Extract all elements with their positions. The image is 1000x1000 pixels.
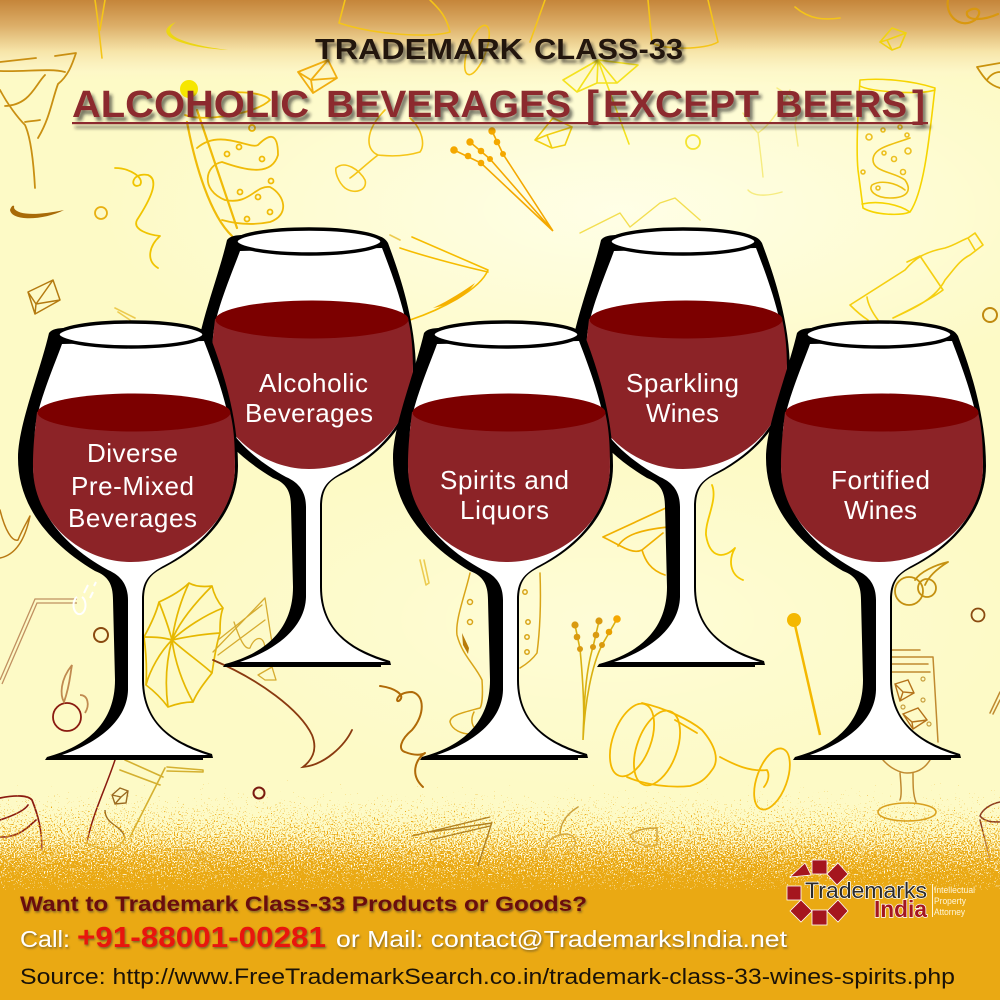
doodle: whisk in speckle <box>412 817 492 866</box>
logo tagline: Attorney <box>934 907 965 917</box>
background: speckled gold transition <box>0 780 1000 892</box>
doodle: lower ring <box>254 788 264 798</box>
logo tagline <box>932 884 975 917</box>
doodle: lower-left cup <box>0 796 42 850</box>
heading: Trademark Class-33: TRADEMARK <box>315 34 523 66</box>
doodle: small ring <box>95 207 107 219</box>
doodle: far right cup <box>980 802 1000 860</box>
logo tagline: Intellectual <box>934 885 975 895</box>
doodle: brown cube <box>28 280 60 314</box>
doodle: ice cube <box>298 60 337 93</box>
doodle: beer glass <box>857 79 935 214</box>
footer: contact line: +91-88001-00281 <box>77 922 326 954</box>
heading: Alcoholic Beverages except beers: ] <box>912 84 925 126</box>
doodle: cocktail pick <box>787 613 820 735</box>
heading: Alcoholic Beverages except beers: ALCOHOLIC <box>72 84 309 126</box>
wine glass: Diverse Pre-Mixed Beverages <box>18 322 238 760</box>
doodle: top straw <box>95 0 105 58</box>
doodle: yellow swoosh <box>166 22 228 50</box>
label <box>68 438 197 533</box>
doodle: top-right glass <box>648 0 840 48</box>
doodle: balloon glass <box>336 110 423 191</box>
doodle: small marks <box>115 235 400 320</box>
doodle: white fizz <box>74 582 96 614</box>
doodle: top lines <box>530 0 545 42</box>
footer: source line: Source: http://www.FreeTrademarkSearch.co.in/trademark-class-33-wines-spirits.php <box>20 964 955 989</box>
label: Liquors <box>460 495 549 525</box>
footer: contact line: or Mail: contact@TrademarksIndia.net <box>336 926 788 952</box>
doodle: yellow pick ball <box>180 80 198 98</box>
doodle: small top umbrella <box>563 60 638 144</box>
doodle: left curl <box>0 510 30 558</box>
label <box>831 465 930 525</box>
label <box>245 368 373 428</box>
doodle: cocktail glass with cubes <box>878 650 938 821</box>
label <box>626 368 739 428</box>
label: Alcoholic <box>259 368 368 398</box>
heading: Trademark Class-33: CLASS-33 <box>534 34 683 66</box>
background: solid gold footer <box>0 890 1000 1000</box>
label: Diverse <box>87 438 178 468</box>
doodle: second bouquet <box>571 615 621 740</box>
heading: Trademark Class-33 <box>315 34 683 66</box>
logo tagline: Property <box>934 896 966 906</box>
doodle: martini behind center <box>400 237 488 320</box>
doodle: bottle <box>850 233 983 320</box>
doodle: tiny mid doodles <box>176 807 657 868</box>
heading: Alcoholic Beverages except beers: EXCEPT <box>603 84 759 126</box>
background: light wash under speckles <box>0 830 1000 892</box>
wine glass: Spirits and Liquors <box>393 322 613 760</box>
background: top orange fade band <box>0 0 1000 85</box>
label: Beverages <box>68 503 197 533</box>
doodle: ring far right <box>983 308 997 322</box>
logo wordmark: Trademarks <box>805 878 927 903</box>
doodle: flute <box>450 573 540 734</box>
doodle: ring left <box>94 628 108 642</box>
doodle: umbrella <box>144 583 223 707</box>
doodle: ring <box>686 135 700 149</box>
label: Pre-Mixed <box>71 471 194 501</box>
doodle: corner martini <box>977 63 1000 88</box>
label: Spirits and <box>440 465 569 495</box>
doodle: right cherries <box>895 562 948 605</box>
doodle: lower-left soda glass <box>87 760 203 850</box>
label: Beverages <box>245 398 373 428</box>
label: Sparkling <box>626 368 739 398</box>
heading: Alcoholic Beverages except beers: BEERS <box>775 84 907 126</box>
doodle: ring right <box>972 608 984 622</box>
doodle: top-left martini glass <box>0 53 76 188</box>
background doodles: upper half <box>0 0 1000 558</box>
doodle: left straw <box>0 599 77 684</box>
label: Wines <box>646 398 719 428</box>
doodle: bent straw <box>580 198 700 233</box>
doodle: heart glass <box>603 507 668 575</box>
doodle: faded martini <box>743 88 798 195</box>
doodle: small cube <box>535 118 572 148</box>
background doodles: lower half <box>0 485 1000 868</box>
heading: Alcoholic Beverages except beers: BEVERAGES <box>326 84 571 126</box>
logo: Trademarks India: India <box>874 896 927 922</box>
footer: contact line: Call: <box>20 926 70 952</box>
heading: Alcoholic Beverages except beers <box>72 84 928 126</box>
doodle: far right marks <box>990 692 1000 714</box>
wine glass: Sparkling Wines <box>570 229 790 667</box>
wine glass: Alcoholic Beverages <box>196 229 416 667</box>
label <box>440 465 569 525</box>
doodle: dot bouquet <box>450 127 553 231</box>
doodle: yellow cube <box>880 28 906 50</box>
doodle: martini swoosh <box>433 283 475 308</box>
doodle: martini foot swoosh <box>10 206 64 218</box>
background: pale glow patches <box>100 20 1000 790</box>
doodle: dark swoosh <box>213 660 352 767</box>
heading: Alcoholic Beverages except beers: [ <box>586 84 599 126</box>
doodle: glass behind umbrella <box>213 598 276 680</box>
wine glass: Fortified Wines <box>766 322 986 760</box>
logo: Trademarks India <box>787 860 975 925</box>
doodle: orange curl <box>948 0 998 23</box>
doodle: top glass <box>339 0 494 78</box>
doodle: yellow curl <box>115 168 160 268</box>
logo mark <box>787 860 848 925</box>
footer: contact line <box>20 922 788 954</box>
doodle: right yellow curl <box>706 485 743 580</box>
label: Wines <box>844 495 917 525</box>
doodle: tall glass with swirl <box>185 92 283 236</box>
label: Fortified <box>831 465 930 495</box>
doodle: brown squiggle <box>380 686 425 787</box>
doodle: straw center <box>420 560 429 585</box>
doodle: cherries <box>53 665 88 731</box>
doodle: flute dark chip <box>462 633 469 654</box>
footer: call to action: Want to Trademark Class-33 Products or Goods? <box>20 893 587 916</box>
doodle: tumbled glass <box>601 698 797 814</box>
